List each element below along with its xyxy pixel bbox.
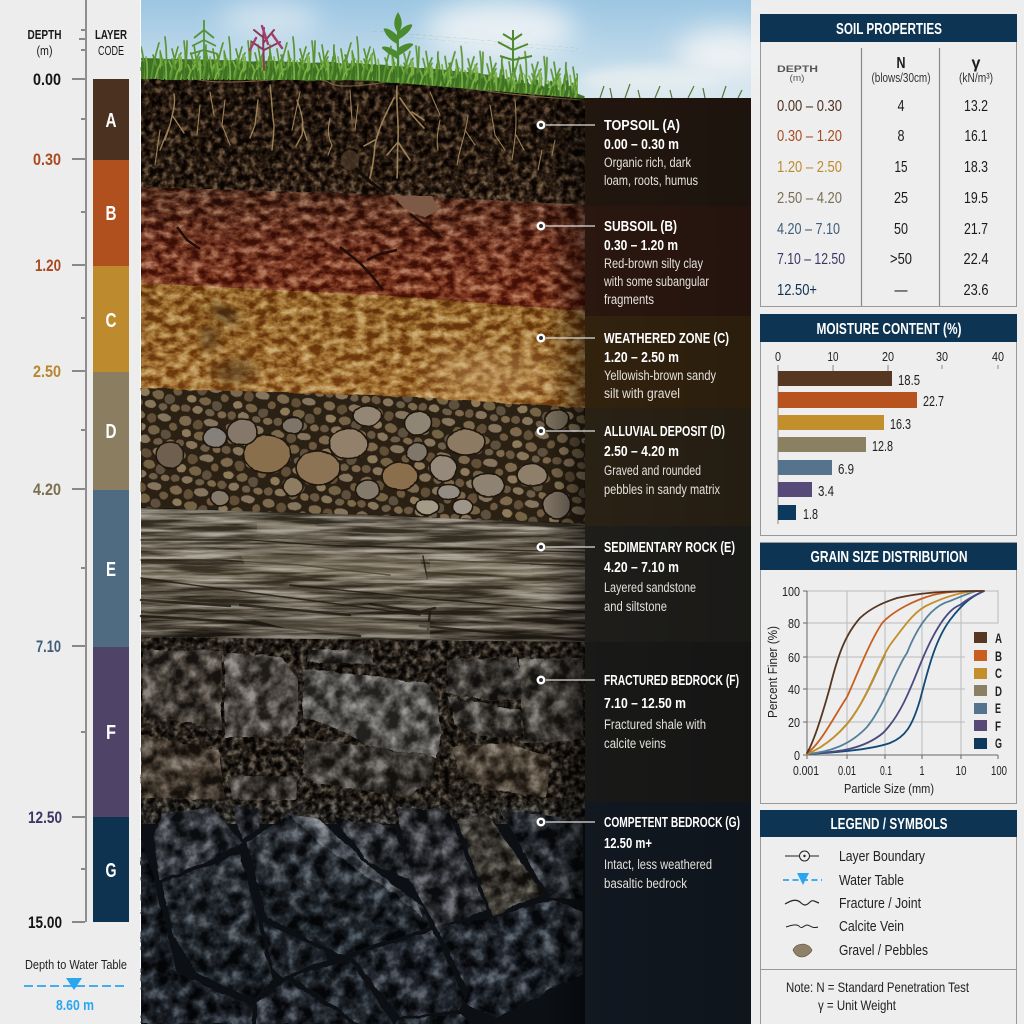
chart grid and axes: 20 <box>788 715 800 730</box>
layer code header <box>95 27 127 58</box>
chart grid and axes: 60 <box>788 650 800 665</box>
panel: grain size distribution <box>760 542 1017 804</box>
alluvial deposit layer <box>141 388 585 524</box>
depth axis header: DEPTH <box>28 27 62 42</box>
shaded right edge of cross-section <box>545 98 585 1024</box>
annotation: fractured bedrock: FRACTURED BEDROCK (F) <box>604 673 739 689</box>
table column headers: (m) <box>790 73 804 83</box>
depth labels: 1.20 <box>35 257 61 275</box>
annotation: fractured bedrock: Fractured shale with <box>604 717 706 732</box>
table rows: 23.6 <box>964 282 988 299</box>
table rows: 2.50 – 4.20 <box>777 190 842 207</box>
annotation: weathered zone: 1.20 – 2.50 m <box>604 350 679 366</box>
chart legend: F <box>995 718 1001 734</box>
depth labels <box>28 71 62 932</box>
table column headers: γ <box>972 55 981 72</box>
layer code bar <box>93 79 129 922</box>
annotation: competent bedrock <box>536 815 740 891</box>
chart grid and axes: 40 <box>788 682 800 697</box>
chart grid and axes: 1 <box>920 763 924 778</box>
note <box>786 979 969 1013</box>
annotation: topsoil: 0.00 – 0.30 m <box>604 137 679 153</box>
annotation: subsoil: Red-brown silty clay <box>604 256 703 271</box>
layer code bar: D <box>106 421 116 443</box>
panel: legend and symbols: LEGEND / SYMBOLS <box>830 816 948 833</box>
sedimentary rock layer <box>141 508 585 642</box>
table column headers: (kN/m³) <box>959 71 993 85</box>
symbol: fracture joint <box>785 896 921 912</box>
table rows: — <box>894 282 908 299</box>
annotation: sedimentary rock: and siltstone <box>604 599 667 614</box>
symbol: gravel <box>793 943 928 959</box>
chart grid and axes: 100 <box>782 584 800 599</box>
axis: 40 <box>992 349 1004 364</box>
grain size curves <box>807 591 984 754</box>
annotation: competent bedrock: basaltic bedrock <box>604 876 687 891</box>
chart legend: A <box>995 630 1002 646</box>
annotation: fractured bedrock: calcite veins <box>604 736 666 751</box>
chart legend: C <box>995 665 1002 681</box>
layer code bar: B <box>106 203 116 225</box>
depth scale column <box>0 0 140 1024</box>
bar chart: 6.9 <box>838 462 854 478</box>
layer code bar: F <box>106 722 116 744</box>
table rows: 16.1 <box>964 128 988 145</box>
axis: 30 <box>936 349 948 364</box>
annotation: subsoil <box>536 219 709 307</box>
depth labels: 15.00 <box>28 914 62 932</box>
table rows: 0.30 – 1.20 <box>777 128 842 145</box>
depth labels: 0.30 <box>33 151 61 169</box>
strata lines <box>141 540 585 640</box>
table rows <box>777 98 989 299</box>
table rows: 12.50+ <box>777 282 817 299</box>
panel: soil properties: SOIL PROPERTIES <box>836 21 942 38</box>
panel: legend and symbols <box>760 810 1017 1024</box>
bar chart: 1.8 <box>803 507 818 523</box>
chart legend: E <box>995 700 1001 716</box>
symbol: fracture joint: Fracture / Joint <box>839 896 921 912</box>
depth axis with ticks <box>72 0 86 922</box>
topsoil layer <box>141 76 585 206</box>
table rows: 18.3 <box>964 159 988 176</box>
sky <box>141 0 775 100</box>
table column headers <box>777 55 993 85</box>
depth axis header <box>28 27 62 58</box>
plant: tall leaf <box>382 12 413 78</box>
bar chart: 3.4 <box>818 484 834 500</box>
annotation: topsoil: Organic rich, dark <box>604 155 691 170</box>
depth labels: 0.00 <box>33 71 61 89</box>
annotation: subsoil: fragments <box>604 292 654 307</box>
depth axis header: (m) <box>36 43 52 58</box>
water table indicator: 8.60 m <box>56 997 94 1014</box>
bar chart: 18.5 <box>898 373 920 389</box>
depth labels: 7.10 <box>36 638 61 656</box>
depth labels: 4.20 <box>33 481 61 499</box>
table rows: 4 <box>898 98 905 115</box>
table column headers: (blows/30cm) <box>872 71 930 85</box>
table rows: 1.20 – 2.50 <box>777 159 842 176</box>
panel: grain size distribution: GRAIN SIZE DISTRIBUTION <box>810 549 968 566</box>
chart grid and axes: 10 <box>956 763 966 778</box>
layer code header: CODE <box>98 43 124 58</box>
plant: right fern <box>498 30 532 72</box>
axis <box>775 349 1004 524</box>
chart grid and axes: 0 <box>794 748 800 763</box>
annotation: sedimentary rock <box>536 540 735 614</box>
chart legend: D <box>995 683 1002 699</box>
bar chart <box>778 371 944 523</box>
layer code bar: A <box>106 110 116 132</box>
plant: fern left <box>190 20 218 62</box>
annotation: competent bedrock: Intact, less weathered <box>604 857 712 872</box>
chart legend <box>974 630 1002 751</box>
symbol: layer boundary <box>785 849 926 865</box>
table rows: >50 <box>890 251 912 268</box>
symbol: gravel: Gravel / Pebbles <box>839 943 928 959</box>
right grass tufts <box>600 84 742 98</box>
table rows: 22.4 <box>964 251 989 268</box>
annotation: competent bedrock: COMPETENT BEDROCK (G) <box>604 815 740 831</box>
chart grid and axes: Percent Finer (%) <box>765 626 780 718</box>
chart legend: G <box>995 735 1002 751</box>
annotation: alluvial deposit: 2.50 – 4.20 m <box>604 444 679 460</box>
panel: soil properties <box>760 14 1017 306</box>
competent bedrock layer <box>141 802 585 1024</box>
chart grid and axes <box>765 584 1007 796</box>
table column headers: DEPTH <box>777 64 818 74</box>
bar chart: 16.3 <box>890 417 911 433</box>
bar chart: 22.7 <box>923 394 944 410</box>
symbol: calcite vein <box>786 919 904 935</box>
chart legend: B <box>995 648 1002 664</box>
annotation: weathered zone: Yellowish-brown sandy <box>604 368 716 383</box>
plant: flowering weed <box>250 26 282 70</box>
boulders <box>156 406 571 519</box>
chart grid and axes: Particle Size (mm) <box>844 781 934 796</box>
table column headers: N <box>896 55 906 72</box>
annotation: weathered zone <box>536 331 729 401</box>
axis: 0 <box>775 349 781 364</box>
fractured blocks <box>141 650 583 800</box>
chart grid and axes: 80 <box>788 616 800 631</box>
annotation: topsoil <box>536 118 698 188</box>
annotation: subsoil: 0.30 – 1.20 m <box>604 238 678 254</box>
layer code bar: E <box>106 559 116 581</box>
subsoil layer <box>141 187 585 312</box>
table rows: 25 <box>894 190 908 207</box>
soil profile illustration <box>140 0 775 1024</box>
depth labels: 2.50 <box>33 363 61 381</box>
annotation: sedimentary rock: SEDIMENTARY ROCK (E) <box>604 540 735 556</box>
table rows: 19.5 <box>964 190 988 207</box>
water table indicator: Depth to Water Table <box>25 957 127 972</box>
annotation: competent bedrock: 12.50 m+ <box>604 836 652 852</box>
table rows: 15 <box>894 159 908 176</box>
table rows: 8 <box>898 128 904 145</box>
fractured bedrock layer <box>141 637 585 803</box>
table rows: 13.2 <box>964 98 988 115</box>
bedrock blocks <box>141 807 583 1024</box>
depth labels: 12.50 <box>28 809 62 827</box>
annotation: fractured bedrock: 7.10 – 12.50 m <box>604 696 686 712</box>
annotation: alluvial deposit <box>536 424 725 497</box>
bar chart: 12.8 <box>872 439 893 455</box>
annotation: subsoil: with some subangular <box>603 274 709 289</box>
chart grid and axes: 0.001 <box>793 763 819 778</box>
axis: 10 <box>828 349 838 364</box>
annotation: alluvial deposit: ALLUVIAL DEPOSIT (D) <box>604 424 725 440</box>
dark annotation panel <box>585 98 751 1024</box>
roots <box>145 78 582 178</box>
soil crack <box>345 150 385 192</box>
annotation: weathered zone: WEATHERED ZONE (C) <box>604 331 729 347</box>
note: γ = Unit Weight <box>818 997 896 1013</box>
chart grid and axes: 100 <box>991 763 1007 778</box>
water table indicator <box>24 957 128 1014</box>
annotation: sedimentary rock: Layered sandstone <box>604 580 696 595</box>
table rows: 50 <box>894 221 908 238</box>
layer code bar: G <box>106 860 116 882</box>
symbol: water table: Water Table <box>839 873 904 889</box>
weathered zone layer <box>141 283 585 408</box>
annotation: alluvial deposit: Graved and rounded <box>604 463 701 478</box>
symbol: calcite vein: Calcite Vein <box>839 919 904 935</box>
symbol: layer boundary: Layer Boundary <box>839 849 926 865</box>
annotation: topsoil: loam, roots, humus <box>604 173 698 188</box>
symbol: water table <box>783 873 904 889</box>
table rows: 21.7 <box>964 221 988 238</box>
table rows: 0.00 – 0.30 <box>777 98 842 115</box>
annotation: topsoil: TOPSOIL (A) <box>604 118 680 134</box>
axis: 20 <box>882 349 894 364</box>
table rows: 4.20 – 7.10 <box>777 221 840 238</box>
annotation: subsoil: SUBSOIL (B) <box>604 219 677 235</box>
layer code header: LAYER <box>95 27 127 42</box>
panel: moisture content <box>760 314 1017 536</box>
grass band <box>141 12 742 99</box>
annotation: weathered zone: silt with gravel <box>604 386 680 401</box>
annotation: sedimentary rock: 4.20 – 7.10 m <box>604 560 679 576</box>
annotation: alluvial deposit: pebbles in sandy matrix <box>604 482 720 497</box>
annotation: fractured bedrock <box>536 673 739 751</box>
panel: moisture content: MOISTURE CONTENT (%) <box>816 321 962 338</box>
table rows: 7.10 – 12.50 <box>777 251 845 268</box>
chart grid and axes: 0.1 <box>880 763 892 778</box>
chart grid and axes: 0.01 <box>838 763 856 778</box>
note: Note: N = Standard Penetration Test <box>786 979 969 995</box>
layer code bar: C <box>106 310 116 332</box>
